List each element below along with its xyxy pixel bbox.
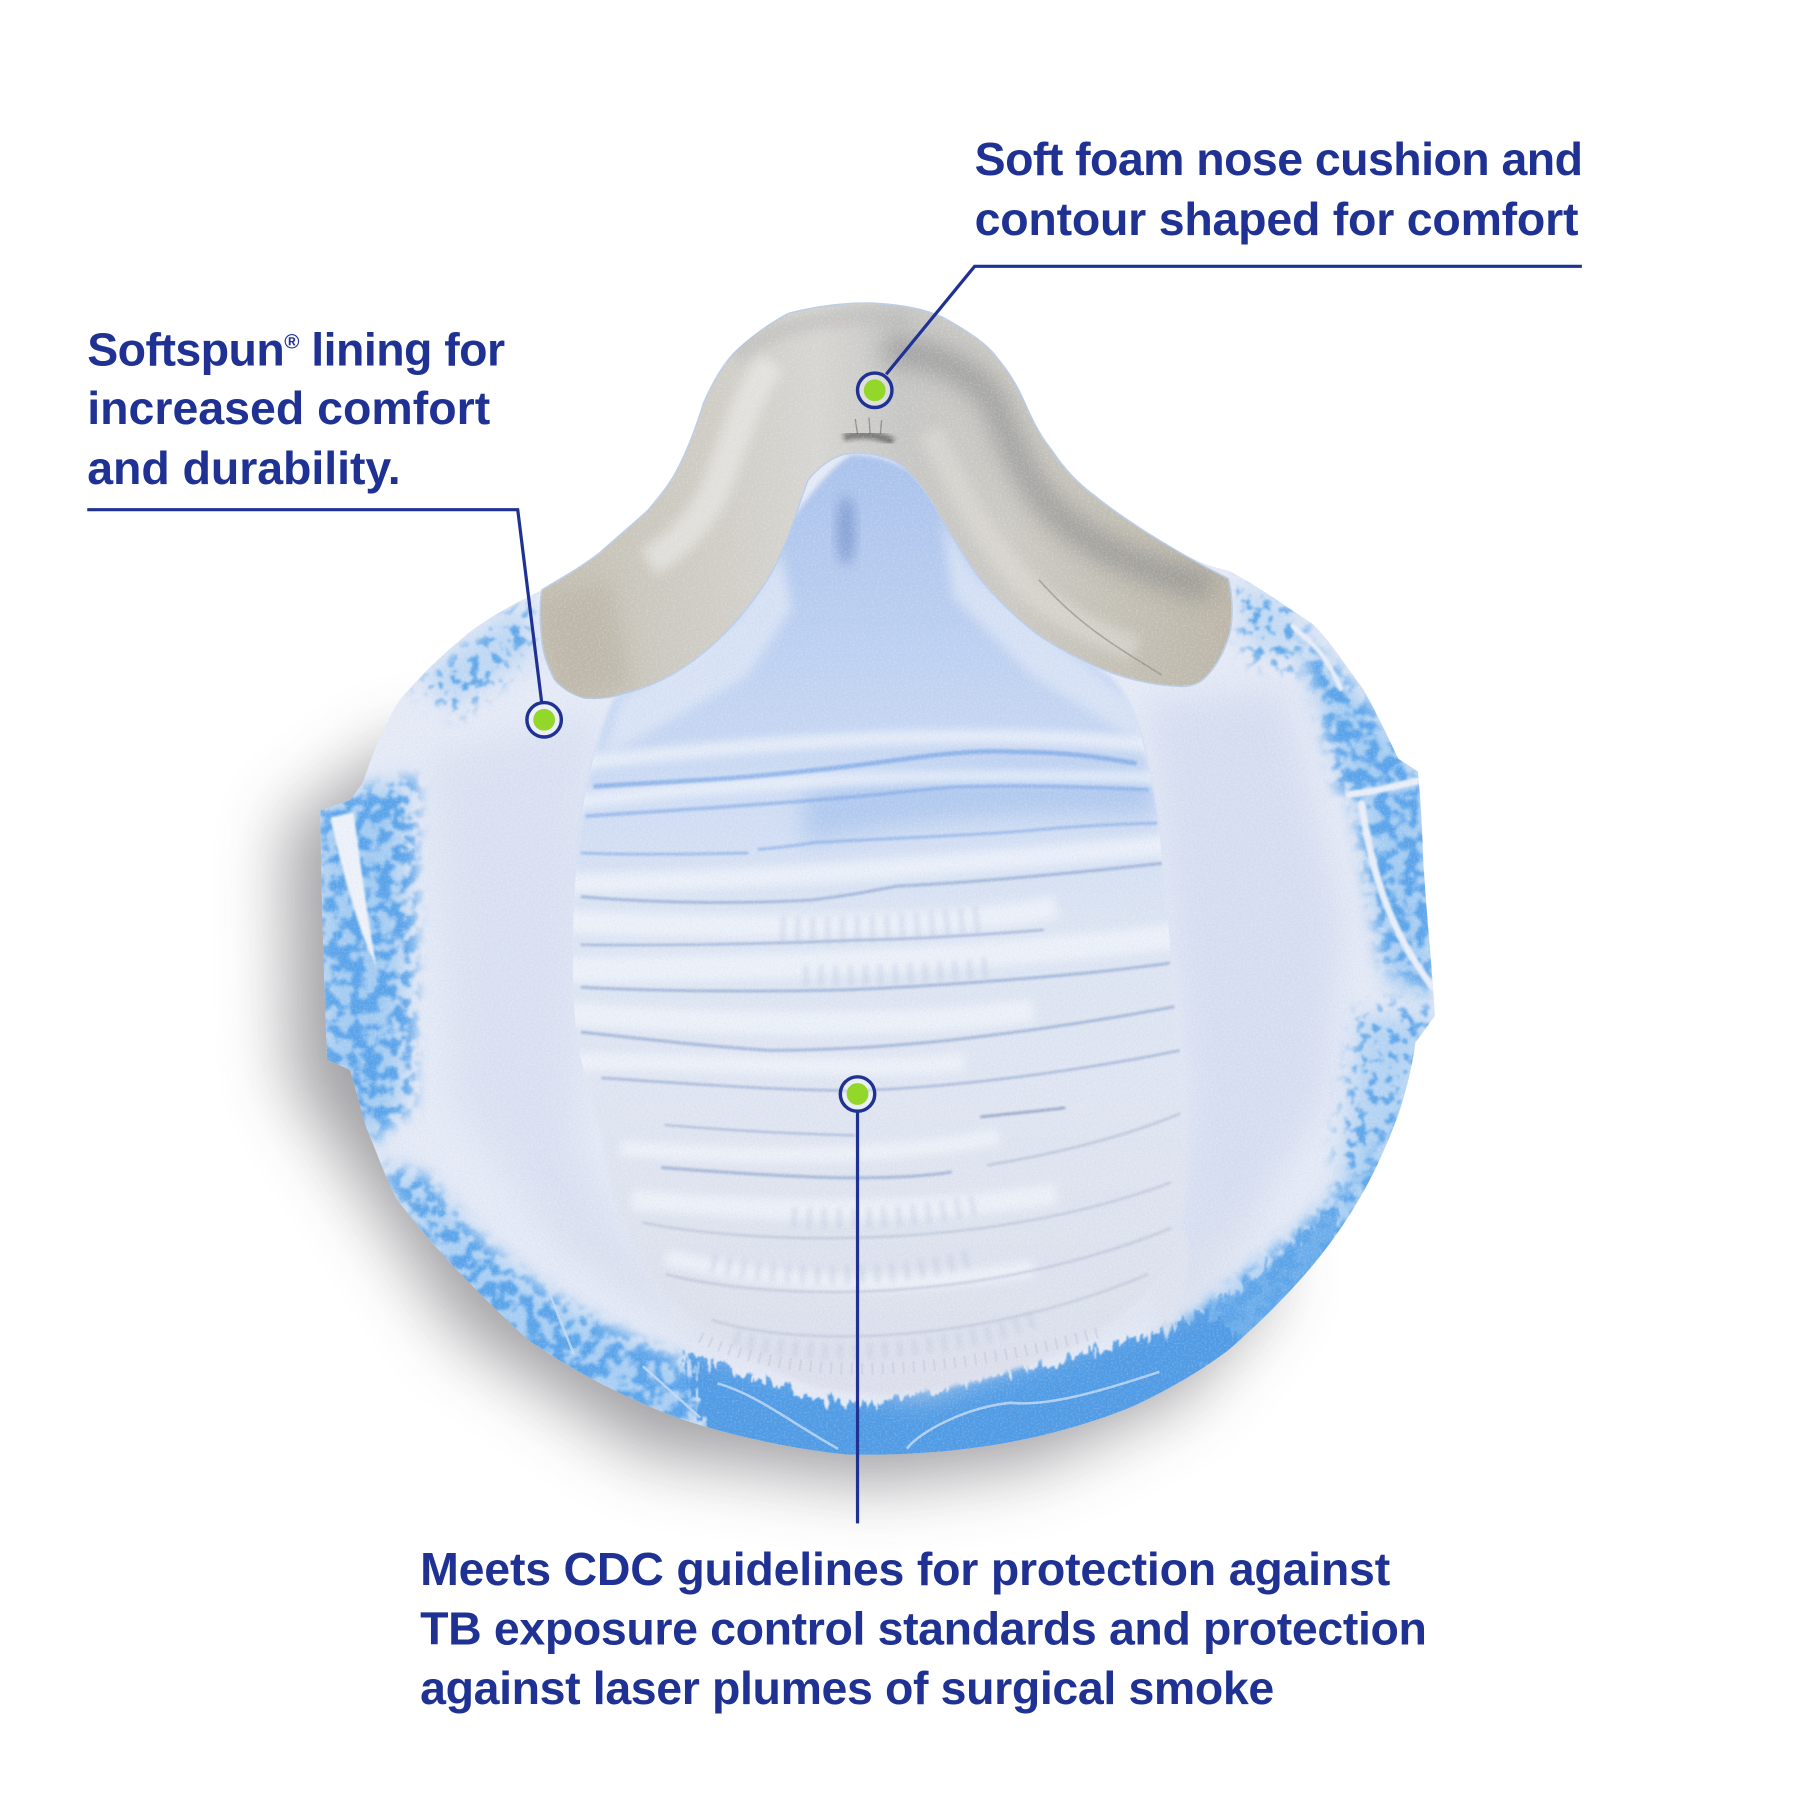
callout text: Softspun xyxy=(87,324,285,376)
leader line xyxy=(87,510,542,704)
callout text: Soft foam nose cushion and xyxy=(975,133,1583,185)
foam highlight left xyxy=(649,362,771,562)
foam wrinkles xyxy=(855,418,882,434)
callout: Softspun lining xyxy=(87,324,561,737)
pale rim streaks xyxy=(551,1297,1159,1449)
callout text: TB exposure control standards and protection xyxy=(420,1602,1427,1654)
foam crease xyxy=(844,435,893,442)
callout text: against laser plumes of surgical smoke xyxy=(420,1662,1274,1714)
white fold on right xyxy=(1154,1228,1190,1341)
callout: nose cushion xyxy=(858,133,1583,408)
blue rim mottling xyxy=(316,574,1441,1481)
foam thin seam xyxy=(1039,580,1162,675)
marker dot xyxy=(527,703,561,737)
central pleated panel xyxy=(551,455,1188,1394)
callout text: Meets CDC guidelines for protection against xyxy=(420,1543,1390,1595)
leader line xyxy=(886,266,1582,374)
lower lining spikes xyxy=(700,1332,1102,1369)
callout text: lining for xyxy=(299,324,505,376)
grain texture xyxy=(310,293,1446,1464)
marker dot xyxy=(858,373,892,408)
solid blue bottom rim xyxy=(680,1308,1244,1455)
foam pale top edge xyxy=(735,317,907,356)
crinkle texture xyxy=(712,918,1033,1351)
blue pleat band xyxy=(804,764,1154,844)
left side lining xyxy=(430,712,677,1320)
right lower blue band xyxy=(1172,1207,1341,1374)
marker dot xyxy=(840,1077,875,1111)
nose shadow streak xyxy=(837,496,855,565)
mask base xyxy=(320,303,1435,1455)
respirator mask illustration xyxy=(310,293,1446,1481)
white pleat highlights xyxy=(551,737,1182,1283)
pale blue wash xyxy=(316,580,1441,1446)
right side lining xyxy=(1148,689,1343,1309)
leader line xyxy=(856,1111,859,1523)
fan side highlights xyxy=(603,551,792,758)
foam left end shade xyxy=(540,580,631,700)
callout text xyxy=(975,133,1583,245)
sparse blue spots xyxy=(413,574,1441,1211)
callout text: ® xyxy=(284,330,299,353)
foam dark band right xyxy=(884,350,1211,588)
pleat lines xyxy=(581,751,1180,1336)
lower lining grey wash xyxy=(505,1182,1274,1395)
callout text xyxy=(420,1543,1427,1714)
callout text: increased comfort xyxy=(87,382,490,434)
right ear fold xyxy=(1293,626,1433,987)
nose foam cushion xyxy=(534,298,1240,700)
blue blotches xyxy=(316,626,1435,1446)
mask shadow xyxy=(287,746,1274,1483)
callout text: contour shaped for comfort xyxy=(975,193,1578,245)
callout text: and durability. xyxy=(87,442,401,494)
foam inner light band xyxy=(930,430,1136,649)
left ear tab fold xyxy=(331,813,377,967)
callout text xyxy=(87,324,505,494)
callout: CDC guidelines xyxy=(420,1077,1427,1714)
